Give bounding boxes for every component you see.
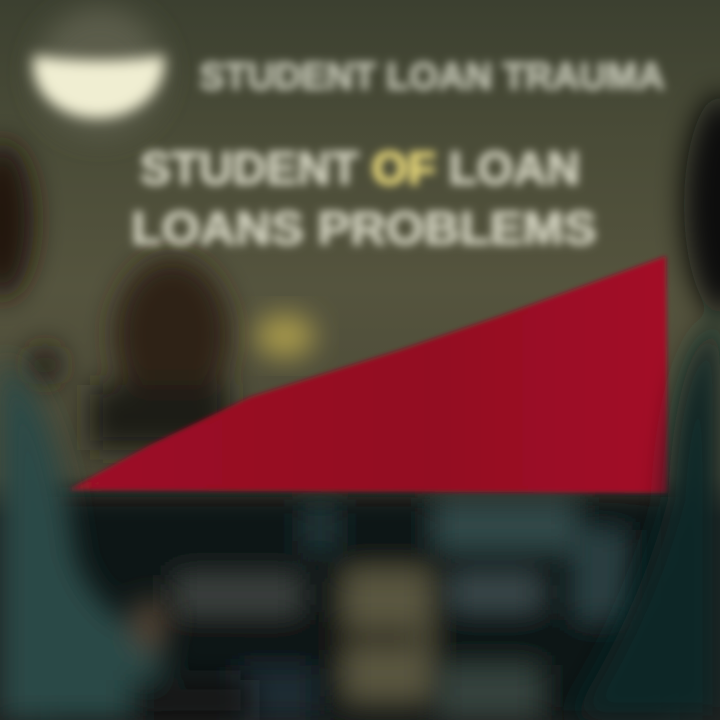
logo ring [36, 8, 164, 136]
logo bright shape [33, 55, 164, 118]
woman with long hair [29, 257, 230, 450]
heading line 2: LOANS PROBLEMS [132, 202, 596, 254]
heading line 1: STUDENT OF LOAN [140, 142, 580, 194]
top title: STUDENT LOAN TRAUMA [200, 56, 664, 98]
yellow light [255, 314, 315, 358]
red triangle [68, 256, 668, 493]
main heading [132, 142, 596, 254]
person at left [0, 142, 250, 720]
logo badge [33, 8, 164, 136]
person at right [570, 95, 720, 720]
audience rows [50, 497, 670, 720]
